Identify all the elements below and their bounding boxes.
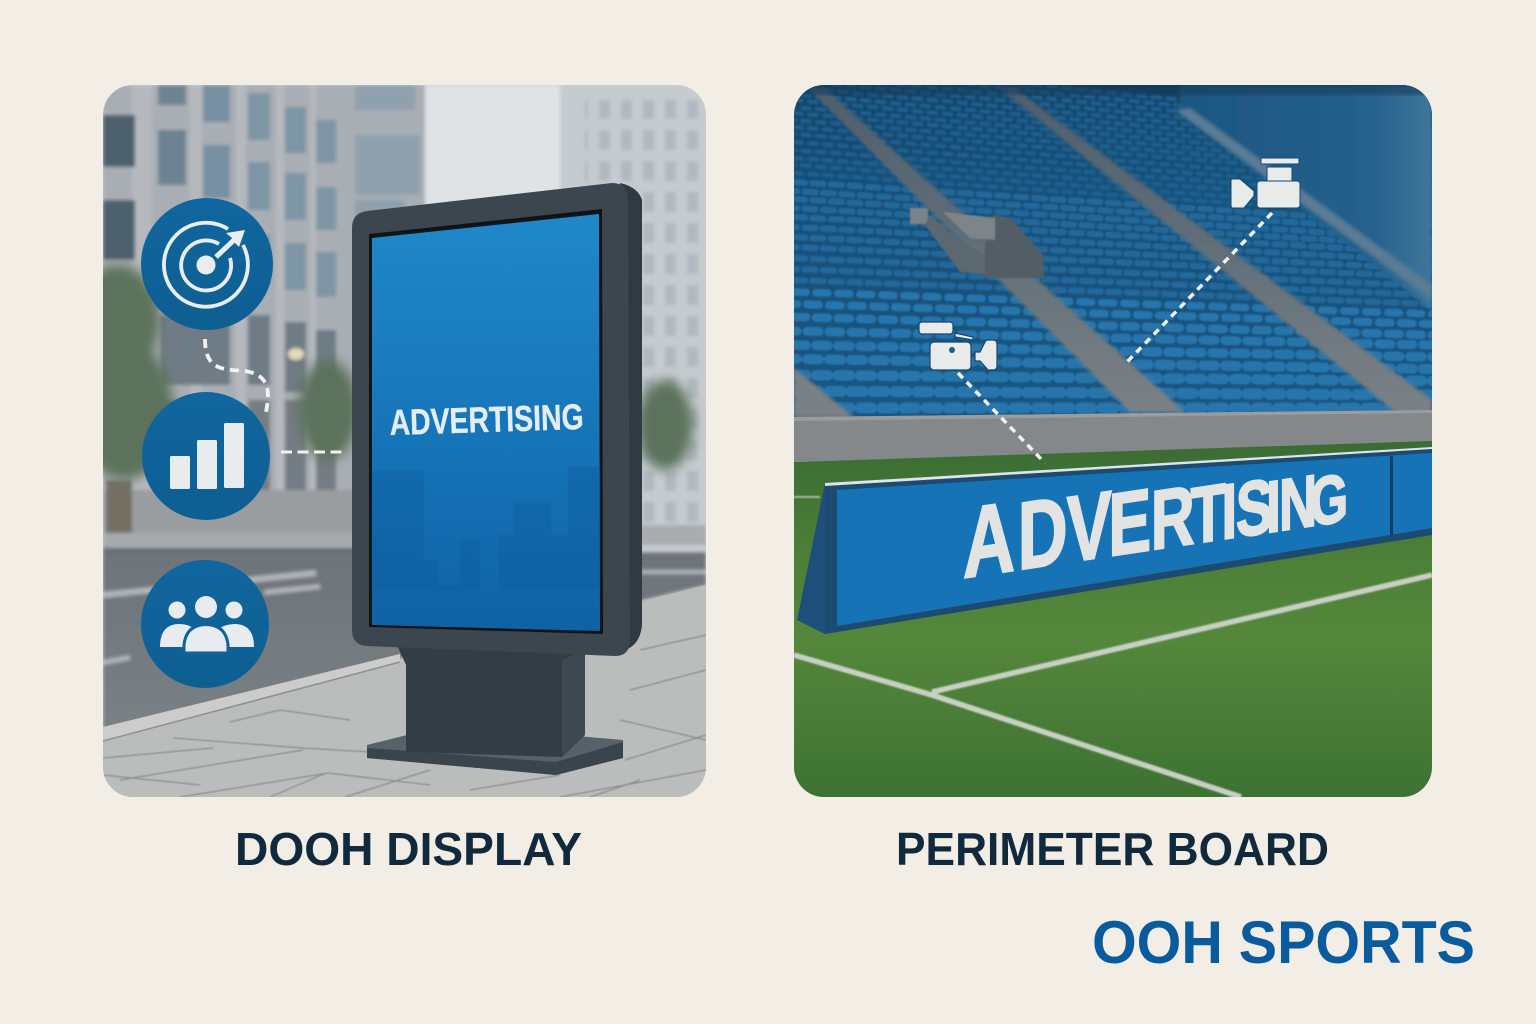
connector: right camera to stands <box>1127 213 1272 362</box>
kerb <box>103 654 400 732</box>
panel: DOOH display street scene <box>76 85 706 797</box>
lower steps <box>794 368 855 418</box>
board label: I <box>1266 464 1281 549</box>
screen label: ADVERTISING <box>389 396 584 443</box>
paving joints <box>103 635 706 797</box>
aisles <box>810 88 1432 412</box>
connector: straight dashed line <box>281 450 342 454</box>
board label: T <box>1191 467 1226 561</box>
panel: perimeter board stadium scene <box>794 61 1432 797</box>
stand column <box>397 645 585 757</box>
icon: right broadcast camera <box>1231 158 1300 208</box>
top right unseated area <box>1180 85 1432 310</box>
board label: N <box>1279 459 1317 547</box>
perimeter advertising board <box>797 430 1432 634</box>
digital display stand <box>352 183 642 775</box>
heading: DOOH display: DOOH DISPLAY <box>235 823 582 875</box>
icon: bar chart <box>142 392 270 520</box>
icon: target <box>141 198 273 330</box>
far sidewalk <box>103 533 430 548</box>
board label: R <box>1151 467 1195 568</box>
camera platform <box>910 208 1044 278</box>
board label: A <box>963 480 1015 600</box>
board label: E <box>1108 471 1151 576</box>
board label: I <box>1221 467 1237 557</box>
seats: middle rows <box>794 182 1432 304</box>
pavement <box>103 585 706 797</box>
board label: G <box>1310 459 1348 541</box>
seats: far rows <box>794 85 1432 212</box>
trees <box>76 265 693 480</box>
concrete wall <box>794 410 1432 462</box>
board frame <box>825 447 1432 634</box>
street background <box>76 85 706 797</box>
display back housing <box>620 183 642 650</box>
stand base <box>367 735 623 775</box>
connector: curved dashed line <box>205 339 268 412</box>
grass pitch <box>794 441 1432 797</box>
pitch lines <box>794 497 1432 797</box>
board face <box>837 453 1432 626</box>
display frame <box>352 183 630 656</box>
icon: audience <box>141 560 269 688</box>
connector: left camera to board <box>958 373 1045 463</box>
board label: S <box>1236 463 1273 554</box>
heading: perimeter board: PERIMETER BOARD <box>896 823 1329 875</box>
seats: near rows <box>794 292 1432 408</box>
stadium stands <box>794 61 1432 425</box>
road <box>103 552 706 730</box>
icon: left broadcast camera <box>919 322 997 370</box>
screen <box>369 209 603 634</box>
top shade <box>802 85 1425 96</box>
screen skyline <box>372 467 600 590</box>
board label: D <box>1018 475 1068 590</box>
board label: V <box>1067 472 1112 583</box>
brand: OOH Sports: OOH SPORTS <box>1092 909 1475 976</box>
board side <box>797 483 825 634</box>
